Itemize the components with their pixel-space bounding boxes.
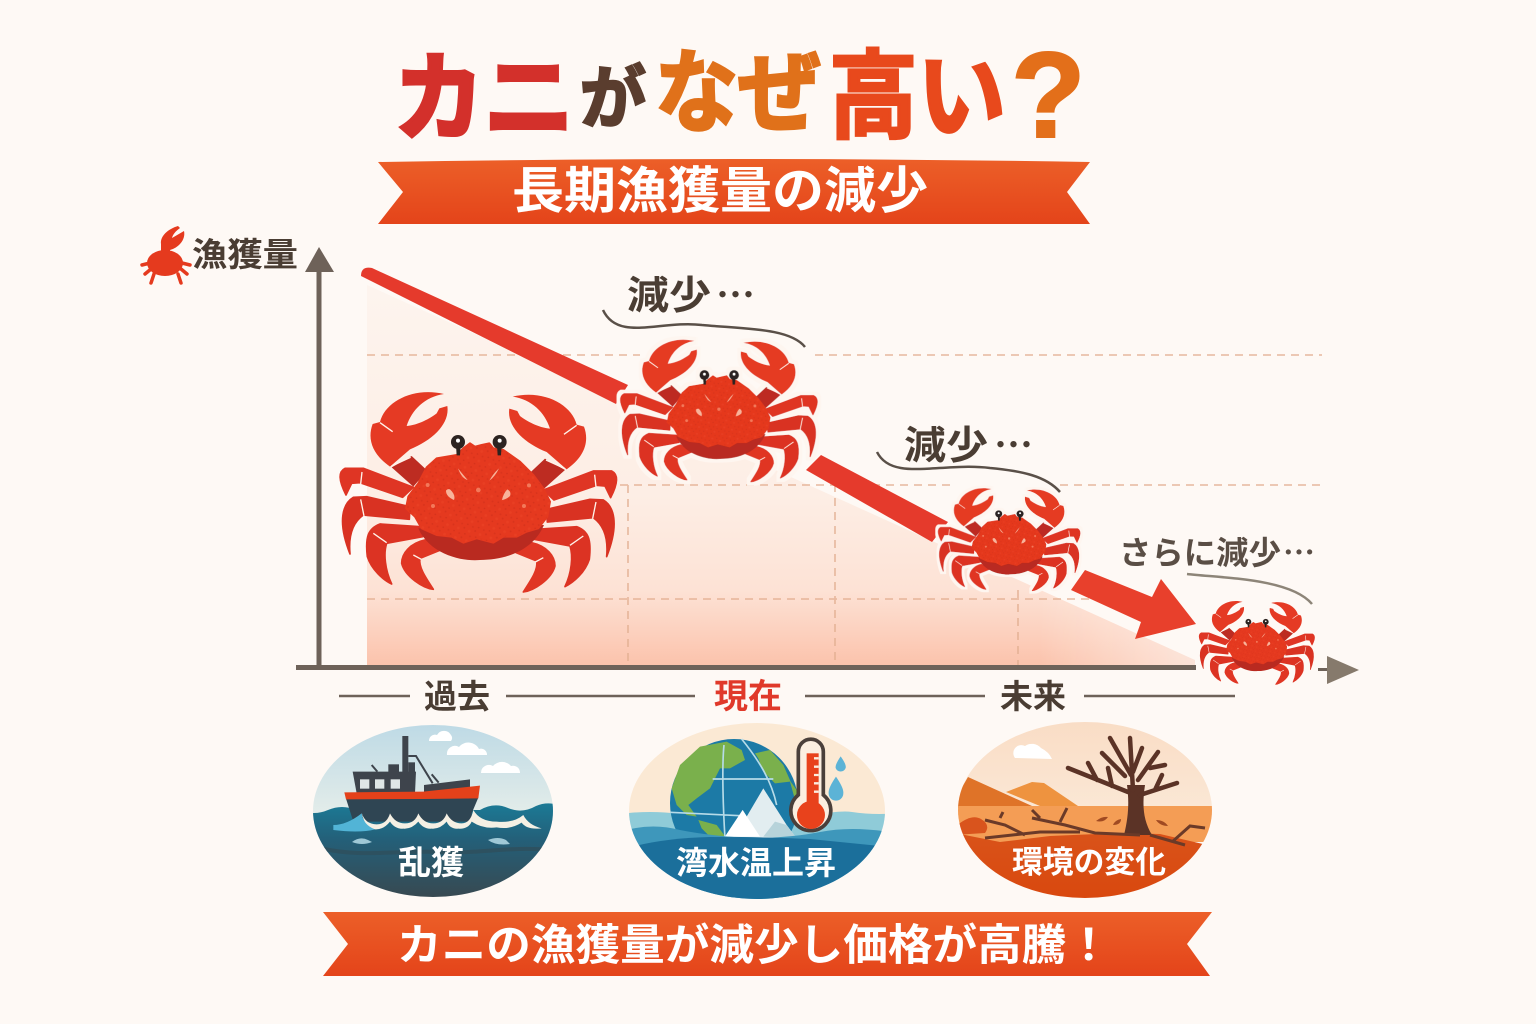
title: ? [1011, 27, 1086, 163]
callout: decrease 1: 減少 [627, 275, 711, 318]
icon: iceberg [725, 788, 797, 838]
label: sea temperature rise: 湾水温上昇 [676, 845, 836, 881]
callout: decrease 2: … [994, 415, 1033, 471]
icon: fishing boat [344, 736, 480, 822]
conclusion ribbon [323, 912, 1212, 976]
title [394, 27, 1086, 163]
icon: water drops [829, 756, 846, 801]
label: environmental change: 環境の変化 [1012, 845, 1166, 880]
icon: dead tree [1068, 738, 1177, 835]
callout: decrease 1: … [716, 265, 755, 321]
panel: environmental change [958, 722, 1212, 898]
crab: past, largest [340, 392, 617, 592]
timeline [339, 678, 1235, 716]
conclusion ribbon: カニの漁獲量が減少し価格が高騰！ [397, 922, 1111, 970]
label: present: 現在 [714, 678, 782, 716]
callout: further decrease [1119, 528, 1315, 604]
callout: decrease 2: 減少 [904, 425, 988, 468]
title: カニ [394, 46, 574, 153]
y axis [305, 247, 334, 668]
subtitle ribbon [378, 159, 1090, 224]
title: なぜ [655, 44, 821, 144]
cracks in ground [985, 808, 1205, 845]
callout: further decrease: … [1283, 528, 1315, 574]
panel: overfishing [313, 725, 553, 897]
title: が [580, 61, 646, 137]
crab: future [938, 488, 1080, 591]
crab: present [621, 340, 817, 482]
crab: furthest future, smallest [1199, 601, 1314, 684]
callout: decrease 1 [603, 265, 805, 347]
x axis [296, 656, 1359, 684]
title: 高い [829, 44, 1006, 151]
label: catch volume: 漁獲量 [192, 236, 298, 273]
icon: small crab [142, 226, 190, 283]
icon: globe [670, 738, 796, 838]
subtitle ribbon: 長期漁獲量の減少 [512, 163, 928, 219]
water [313, 803, 553, 897]
callout: decrease 2 [877, 415, 1060, 492]
panel: sea temperature rise [629, 723, 885, 899]
icon: thermometer [791, 739, 831, 831]
label: future: 未来 [1000, 678, 1066, 715]
label: past: 過去 [424, 678, 490, 715]
y axis label [142, 226, 298, 283]
callout: further decrease: さらに減少 [1119, 535, 1281, 571]
trend arrow [361, 268, 1196, 639]
label: overfishing: 乱獲 [398, 844, 464, 881]
chart: shaded area under trend [367, 285, 1322, 665]
